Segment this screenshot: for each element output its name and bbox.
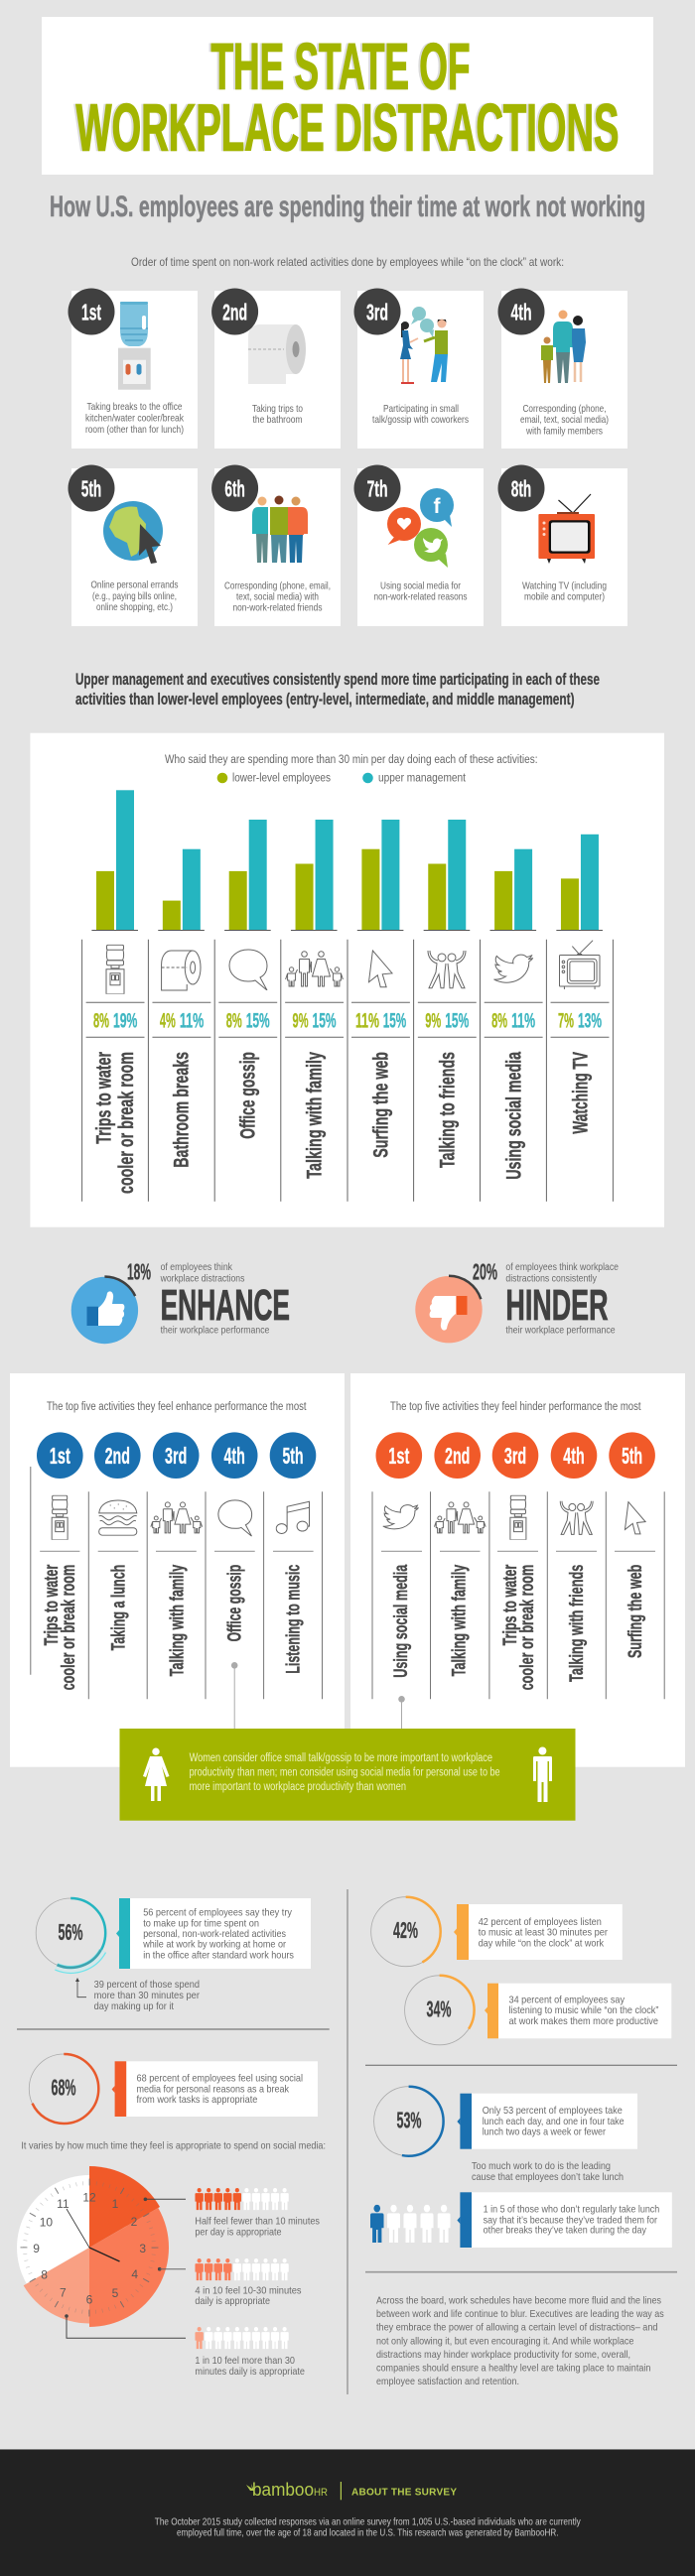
arrow xyxy=(75,1978,86,1997)
enhance text xyxy=(160,1261,290,1336)
panel: comparison chart xyxy=(30,733,664,1227)
activity labels: Office gossip xyxy=(223,1565,245,1641)
note xyxy=(94,1979,200,2012)
activity labels: Trips to water xyxy=(93,1052,116,1144)
caption xyxy=(522,580,607,603)
note: more than 30 minutes per xyxy=(94,1990,200,2001)
bar chart xyxy=(91,790,603,931)
stat: hinder xyxy=(415,1258,619,1344)
activity labels: Using social media xyxy=(390,1565,412,1678)
icon: globe and cursor xyxy=(103,501,163,564)
enhance text: ENHANCE xyxy=(161,1281,290,1330)
percentages xyxy=(93,1010,602,1033)
caption: non-work-related friends xyxy=(232,602,322,614)
percentages: 7% xyxy=(558,1010,574,1033)
lunch note: Too much work to do is the leading xyxy=(472,2160,611,2172)
percentages: 9% xyxy=(425,1010,441,1033)
stat: hinder: 20% xyxy=(473,1258,497,1284)
callout: gender difference xyxy=(119,1729,576,1821)
caption: four in ten: 4 in 10 feel 10-30 minutes xyxy=(195,2284,302,2296)
rank circles xyxy=(375,1432,655,1479)
chart icons xyxy=(106,941,600,994)
card 6th: friends xyxy=(211,464,341,626)
text box xyxy=(116,1898,311,1969)
closing paragraph: they embrace the power of allowing a certain level of distractions– and xyxy=(376,2322,658,2334)
percentages: 11% xyxy=(355,1010,379,1033)
text box: traded breaks: say that it’s because they’ve traded them for xyxy=(484,2214,657,2226)
text box: listening to music while “on the clock” xyxy=(508,2004,659,2016)
text box: 68 percent of employees feel using social xyxy=(137,2073,303,2085)
progress ring 53% xyxy=(374,2087,444,2156)
caption: one in ten xyxy=(195,2355,305,2378)
caption: four in ten xyxy=(195,2284,302,2307)
rank badge xyxy=(498,464,544,512)
text box: to make up for time spent on xyxy=(143,1917,259,1929)
text box xyxy=(454,1904,623,1960)
icons xyxy=(383,1495,645,1540)
logo: bamboo xyxy=(252,2480,314,2500)
percentages: 15% xyxy=(313,1010,337,1033)
callout text xyxy=(190,1752,500,1793)
activity labels: Surfing the web xyxy=(370,1052,393,1158)
clock numerals: 6 xyxy=(86,2292,93,2306)
caption: Watching TV (including xyxy=(522,580,607,591)
stat: 42 percent xyxy=(371,1897,623,1967)
rank badge xyxy=(211,288,258,335)
text box: traded breaks: other breaks they’ve taken during the day xyxy=(484,2225,647,2237)
text box: 34 percent of employees say xyxy=(508,1994,626,2005)
progress ring 42% xyxy=(371,1897,441,1967)
caption: email, text, social media) xyxy=(520,414,609,426)
text box: traded breaks: 1 in 5 of those who don’t regularly take lunch xyxy=(484,2204,659,2216)
intro line: Order of time spent on non-work related activities done by employees while “on the clock” at work: xyxy=(131,255,564,269)
caption xyxy=(91,580,179,613)
rank badge: 7th xyxy=(367,476,387,502)
caption: online shopping, etc.) xyxy=(96,601,173,613)
progress ring 42%: 42% xyxy=(393,1917,418,1943)
stat: enhance xyxy=(70,1258,290,1344)
icon: thumbs up xyxy=(70,1276,138,1344)
rank badge xyxy=(68,464,115,512)
lunch note: cause that employees don’t take lunch xyxy=(472,2171,624,2183)
percentages: 15% xyxy=(445,1010,469,1033)
chart title: Who said they are spending more than 30 min per day doing each of these activities: xyxy=(165,754,538,766)
rank badge: 8th xyxy=(511,476,531,502)
clock numerals: 3 xyxy=(139,2242,146,2255)
activity labels: cooler or break room xyxy=(115,1052,138,1194)
card 2nd: toilet paper xyxy=(211,288,341,449)
caption xyxy=(85,401,185,436)
percentages: 15% xyxy=(246,1010,270,1033)
icons xyxy=(52,1495,310,1540)
column grid xyxy=(31,1467,323,1699)
rank badge: 6th xyxy=(224,476,245,502)
percentages: 19% xyxy=(113,1010,138,1033)
social media time intro: It varies by how much time they feel is appropriate to spend on social media: xyxy=(21,2140,326,2152)
caption: one in ten: 1 in 10 feel more than 30 xyxy=(195,2355,295,2367)
caption xyxy=(373,580,467,603)
percentages: 11% xyxy=(180,1010,204,1033)
activity labels: Talking to friends xyxy=(437,1052,460,1168)
clock chart xyxy=(17,2166,169,2327)
clock numerals: 11 xyxy=(57,2197,70,2211)
caption: Participating in small xyxy=(383,403,459,415)
text box: to music at least 30 minutes per xyxy=(479,1927,608,1939)
caption: kitchen/water cooler/break xyxy=(85,413,185,425)
caption: the bathroom xyxy=(252,414,303,426)
caption: half xyxy=(195,2216,320,2239)
center divider xyxy=(347,1889,348,2394)
text box: media for personal reasons as a break xyxy=(137,2083,290,2095)
icon: family xyxy=(541,310,586,383)
legend xyxy=(217,773,467,785)
callout text: more important to workplace productivity than women xyxy=(190,1781,406,1793)
card 1st: water cooler xyxy=(68,288,198,449)
title xyxy=(75,30,620,165)
caption: room (other than for lunch) xyxy=(85,424,184,436)
activity labels: cooler or break room xyxy=(516,1565,538,1690)
activity labels: Trips to water xyxy=(41,1564,63,1645)
column grid xyxy=(372,1491,664,1699)
activity labels xyxy=(41,1564,304,1690)
about label: ABOUT THE SURVEY xyxy=(351,2487,457,2498)
callout text: Women consider office small talk/gossip to be more important to workplace xyxy=(190,1752,492,1764)
caption xyxy=(520,403,609,437)
progress ring 53%: 53% xyxy=(397,2107,421,2132)
card 7th: social media xyxy=(353,464,484,626)
activity labels xyxy=(93,1052,592,1194)
text box: day while “on the clock” at work xyxy=(479,1937,605,1949)
survey note: employed full time, over the age of 18 and located in the U.S. This research was generated by BambooHR. xyxy=(177,2527,558,2539)
callout text: productivity than men; men consider using social media for personal use to be xyxy=(190,1766,500,1778)
note: 39 percent of those spend xyxy=(94,1979,200,1991)
percentages: 4% xyxy=(160,1010,176,1033)
hinder text: HINDER xyxy=(505,1281,608,1330)
rank badge: 3rd xyxy=(366,300,388,325)
text box: lunch each day, and one in four take xyxy=(483,2116,625,2127)
icon: toilet paper xyxy=(248,324,306,384)
clock numerals: 1 xyxy=(112,2197,119,2211)
stat: enhance: 18% xyxy=(127,1258,151,1284)
rank badge xyxy=(68,288,115,335)
hinder text xyxy=(505,1261,619,1336)
text box xyxy=(112,2061,318,2117)
icon: man xyxy=(533,1746,552,1802)
caption: Using social media for xyxy=(380,580,461,591)
enhance text: of employees think xyxy=(161,1261,233,1273)
rank circles: 5th xyxy=(622,1443,642,1469)
rank circles: 5th xyxy=(282,1443,304,1469)
caption: (e.g., paying bills online, xyxy=(92,590,177,602)
clock numerals: 4 xyxy=(131,2267,138,2281)
clock numerals: 2 xyxy=(131,2215,138,2229)
progress ring 56% xyxy=(36,1898,105,1970)
caption xyxy=(372,403,469,426)
icon: three friends xyxy=(252,496,308,563)
stat: 34 percent xyxy=(405,1976,671,2045)
panel: enhance activities xyxy=(10,1373,345,1767)
rank circles: 3rd xyxy=(165,1443,187,1469)
icon: social media bubbles xyxy=(387,488,454,568)
rank circles: 3rd xyxy=(504,1443,526,1469)
enhance text: workplace distractions xyxy=(160,1273,244,1285)
rank badge: 2nd xyxy=(222,300,247,325)
caption: talk/gossip with coworkers xyxy=(372,414,469,426)
title: THE STATE OF xyxy=(210,30,471,103)
text box: while at work by working at home or xyxy=(142,1939,286,1951)
caption: one in ten: minutes daily is appropriate xyxy=(195,2366,305,2378)
rank badge xyxy=(498,288,544,335)
percentages: 8% xyxy=(93,1010,109,1033)
clock numerals xyxy=(33,2191,146,2306)
caption: Online personal errands xyxy=(91,580,179,591)
title panel xyxy=(42,17,653,175)
caption: half: per day is appropriate xyxy=(195,2227,282,2239)
progress ring 34% xyxy=(405,1976,475,2045)
activity labels: Listening to music xyxy=(282,1565,304,1674)
stat: 53 percent xyxy=(374,2087,637,2183)
caption: non-work-related reasons xyxy=(373,591,467,603)
people row: half xyxy=(195,2188,289,2210)
text box: lunch two days a week or fewer xyxy=(483,2126,606,2138)
text box: traded breaks xyxy=(457,2192,672,2248)
icon: television xyxy=(538,494,595,564)
icon: water cooler xyxy=(118,302,151,390)
caption: Taking trips to xyxy=(252,403,303,415)
icon: woman xyxy=(143,1748,169,1801)
caption xyxy=(224,580,331,614)
activity labels: cooler or break room xyxy=(58,1565,79,1690)
progress ring 34%: 34% xyxy=(427,1996,451,2022)
activity labels xyxy=(390,1564,646,1690)
caption: mobile and computer) xyxy=(524,591,605,603)
closing paragraph: distractions may hinder workplace productivity for some, overall, xyxy=(376,2349,630,2361)
card 4th: family xyxy=(498,288,627,449)
stat: 68 percent xyxy=(29,2054,318,2124)
rank circles: 1st xyxy=(388,1443,410,1469)
activity labels: Talking with family xyxy=(166,1565,188,1676)
text box: from work tasks is appropriate xyxy=(137,2094,258,2106)
connector: 10-30 minutes xyxy=(158,2267,186,2270)
people row: one in ten xyxy=(195,2327,289,2349)
card 8th: TV xyxy=(498,464,627,626)
icon: social media bubbles: f xyxy=(433,495,441,518)
legend: lower-level employees xyxy=(232,773,331,785)
clock numerals: 12 xyxy=(82,2191,96,2205)
closing paragraph: companies should ensure a healthy level are taking place to maintain xyxy=(376,2362,651,2374)
connector: social media to callout xyxy=(398,1696,405,1729)
text box: 56 percent of employees say they try xyxy=(143,1907,293,1919)
activity labels: Office gossip xyxy=(237,1052,260,1139)
text box: 42 percent of employees listen xyxy=(479,1916,602,1928)
panel: ranked activities xyxy=(68,288,627,626)
progress ring 56%: 56% xyxy=(58,1919,83,1945)
panel heading: The top five activities they feel hinder performance the most xyxy=(390,1401,641,1413)
logo: HR xyxy=(314,2487,328,2499)
rank badge: 1st xyxy=(81,300,101,325)
rank circles: 1st xyxy=(50,1443,70,1469)
clock numerals: 10 xyxy=(40,2215,53,2229)
clock numerals: 9 xyxy=(33,2242,40,2255)
clock numerals: 8 xyxy=(41,2268,48,2282)
rank circles: 2nd xyxy=(445,1443,470,1469)
one in five people xyxy=(370,2205,451,2243)
activity labels: Talking with family xyxy=(304,1052,327,1179)
percentages: 15% xyxy=(383,1010,406,1033)
progress ring 68%: 68% xyxy=(52,2075,75,2101)
text box: at work makes them more productive xyxy=(508,2015,658,2027)
closing paragraph xyxy=(376,2295,664,2387)
caption xyxy=(252,403,303,426)
caption: Taking breaks to the office xyxy=(87,401,183,413)
stat: 56 percent xyxy=(36,1898,311,2012)
text box: personal, non-work-related activities xyxy=(143,1928,286,1940)
progress ring 68% xyxy=(29,2054,98,2124)
survey note xyxy=(155,2515,581,2539)
text box: in the office after standard work hours xyxy=(143,1950,294,1962)
column grid xyxy=(82,940,613,1202)
clock hands xyxy=(67,2209,89,2248)
percentages: 9% xyxy=(293,1010,309,1033)
activity labels: Surfing the web xyxy=(625,1565,646,1658)
caption: with family members xyxy=(525,425,603,437)
icon: two people talking xyxy=(400,307,448,383)
activity labels: Trips to water xyxy=(499,1564,521,1645)
percentages: 13% xyxy=(578,1010,602,1033)
rank badge: 4th xyxy=(510,300,532,325)
text box xyxy=(457,2094,637,2149)
rank badge xyxy=(353,464,401,512)
rank badge xyxy=(211,464,258,512)
people row: four in ten xyxy=(195,2258,289,2280)
connector: office gossip to callout xyxy=(231,1662,238,1729)
closing paragraph: not only allowing it, but even encouraging it. And while workplace xyxy=(376,2335,634,2347)
legend: upper management xyxy=(378,773,467,785)
survey note: The October 2015 study collected responses via an online survey from 1,005 U.S.-based individuals who are currently xyxy=(155,2515,581,2527)
rank circles xyxy=(37,1432,316,1479)
hinder text: of employees think workplace xyxy=(505,1261,619,1273)
text box: Only 53 percent of employees take xyxy=(483,2105,623,2117)
activity labels: Bathroom breaks xyxy=(171,1052,194,1168)
rank badge xyxy=(353,288,401,335)
rank circles: 4th xyxy=(224,1443,245,1469)
hinder text: their workplace performance xyxy=(505,1324,616,1336)
caption: Corresponding (phone, xyxy=(522,403,606,415)
enhance text: their workplace performance xyxy=(161,1324,270,1336)
panel heading: The top five activities they feel enhance performance the most xyxy=(47,1401,307,1413)
rank badge: 5th xyxy=(81,476,101,502)
caption: half: Half feel fewer than 10 minutes xyxy=(195,2216,320,2228)
icon: thumbs down xyxy=(415,1276,483,1344)
clock numerals: 5 xyxy=(112,2286,119,2300)
caption: four in ten: daily is appropriate xyxy=(195,2295,270,2307)
activity labels: Taking a lunch xyxy=(107,1565,129,1650)
activity labels: Using social media xyxy=(503,1052,526,1180)
activity labels: Talking with friends xyxy=(566,1565,588,1682)
caption: Corresponding (phone, email, xyxy=(224,580,331,591)
rank circles: 4th xyxy=(563,1443,585,1469)
card 3rd: small talk xyxy=(353,288,484,449)
lunch note xyxy=(472,2160,624,2183)
connector: under 10 minutes xyxy=(144,2197,186,2201)
footer xyxy=(0,2449,695,2576)
activity labels: Talking with family xyxy=(449,1565,471,1676)
percentages: 8% xyxy=(226,1010,242,1033)
card 5th: online errands xyxy=(68,464,198,626)
note: day making up for it xyxy=(94,2000,174,2012)
hinder text: distractions consistently xyxy=(505,1273,598,1285)
panel: hinder activities xyxy=(350,1373,685,1767)
text box xyxy=(485,1984,671,2038)
percentages: 8% xyxy=(491,1010,507,1033)
caption: text, social media) with xyxy=(236,591,319,603)
clock numerals: 7 xyxy=(60,2286,67,2300)
activity labels: Watching TV xyxy=(570,1052,592,1134)
connector: over 30 minutes xyxy=(65,2314,186,2338)
percentages: 11% xyxy=(511,1010,535,1033)
closing paragraph: employee satisfaction and retention. xyxy=(376,2376,519,2387)
rank circles: 2nd xyxy=(105,1443,130,1469)
heading: upper management xyxy=(75,670,600,708)
